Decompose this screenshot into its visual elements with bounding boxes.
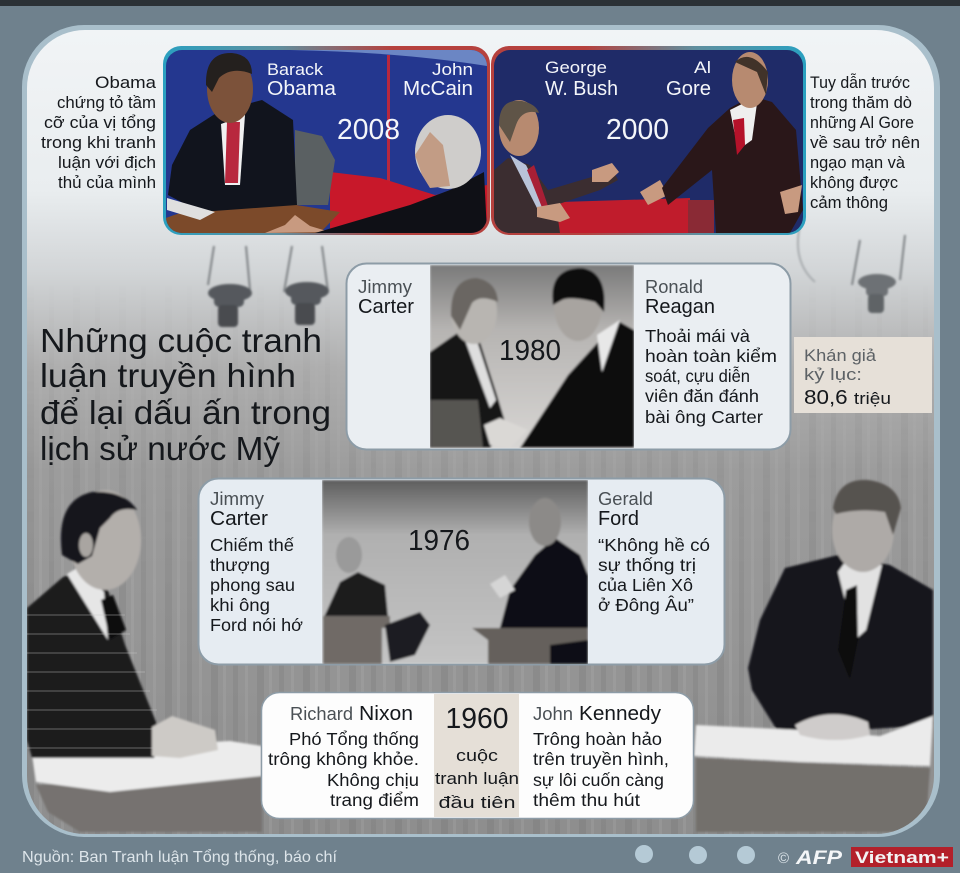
panel: 2000 debate: Gore (666, 78, 711, 100)
panel: 1976 debate: thượng (210, 555, 270, 575)
panel: 1960 debate: Không chịu (327, 770, 419, 790)
panel: 1980 debate: Reagan (645, 296, 715, 318)
studio lights (208, 225, 905, 327)
panel: 1976 debate: khi ông (210, 595, 270, 615)
year box: 1960: 1960 (446, 703, 508, 735)
photo: Carter and Reagan (430, 265, 634, 449)
year box: 1960: cuộc (456, 746, 499, 765)
panel: 1976 debate: Chiếm thế (210, 535, 294, 555)
panel: 1976 debate: sự thống trị (598, 555, 696, 575)
panel: 1960 debate: sự lôi cuốn càng (533, 770, 664, 790)
panel: 1976 debate: “Không hề có (598, 535, 710, 555)
panel: 1960 debate: trông không khỏe. (268, 749, 419, 769)
left caption: Obama: cỡ của vị tổng (44, 113, 156, 132)
left caption: Obama: trong khi tranh (41, 133, 156, 152)
panel: 2008 debate (163, 46, 490, 235)
left caption: Obama: chứng tỏ tầm (57, 93, 156, 112)
photo: Richard Nixon at desk (27, 490, 262, 832)
panel: 2008 debate: Barack (267, 60, 324, 79)
panel: 2008 debate: Obama (267, 78, 337, 100)
scan lines over Nixon (27, 615, 160, 748)
callout: record audience: kỷ lục: (804, 365, 862, 384)
panel: 1980 debate: Jimmy (358, 277, 412, 297)
title: để lại dấu ấn trong (40, 394, 331, 431)
panel: 1960 debate: Richard (290, 704, 353, 724)
title: lịch sử nước Mỹ (40, 430, 281, 467)
panel: 1960 debate: trên truyền hình, (533, 749, 669, 769)
panel: 1980 debate: hoàn toàn kiểm (645, 346, 777, 366)
navigation dots (635, 845, 755, 864)
right caption: Gore: cảm thông (810, 193, 888, 212)
panel: 1960 debate: trang điểm (330, 790, 419, 810)
panel: 1980 debate: viên đăn đánh (645, 386, 759, 406)
logo: AFP (778, 848, 842, 869)
panel: 2000 debate: W. Bush (545, 78, 618, 100)
logo: AFP: © (778, 850, 789, 867)
right caption: Gore: ngạo mạn và (810, 153, 906, 172)
panel: 1960 debate: Phó Tổng thống (289, 729, 419, 749)
left caption: Obama: luận với địch (58, 153, 156, 172)
callout: record audience: Khán giả (804, 346, 877, 365)
logo: AFP: AFP (795, 848, 842, 869)
panel: 2008 debate: John (432, 60, 473, 79)
right caption: Gore: không được (810, 173, 898, 192)
right caption: Gore: về sau trở nên (810, 133, 920, 152)
panel: 2000 debate: 2000 (606, 114, 669, 146)
panel: 1960 debate: Nixon (359, 703, 413, 725)
panel: 2008 debate: McCain (403, 78, 473, 100)
panel: 1976 debate: của Liên Xô (598, 575, 693, 595)
source note: Nguồn: Ban Tranh luận Tổng thống, báo chí (22, 848, 338, 866)
left caption: Obama (41, 73, 157, 192)
panel: 1960 debate: Trông hoàn hảo (533, 729, 662, 749)
year box: 1960: đầu tiên (438, 793, 516, 812)
left caption: Obama: Obama (95, 73, 157, 92)
right caption: Gore: trong thăm dò (810, 93, 912, 112)
title: luận truyền hình (40, 357, 296, 394)
logo: Vietnam+: Vietnam+ (855, 848, 949, 867)
panel: 2000 debate (491, 46, 806, 235)
panel: 1976 debate: Jimmy (210, 489, 264, 509)
panel: 1980 debate: bài ông Carter (645, 407, 763, 427)
panel: 1980 debate: Thoải mái và (645, 326, 750, 346)
panel: 1960 debate: Kennedy (579, 703, 661, 725)
panel: 1976 debate: 1976 (408, 525, 470, 557)
panel: 1976 debate: Carter (210, 508, 268, 530)
panel: 1980 debate: Ronald (645, 277, 703, 297)
panel: 1960 debate: John (533, 704, 573, 724)
panel: 1976 debate: phong sau (210, 575, 295, 595)
photo: Carter and Ford (322, 480, 588, 664)
panel: 1976 debate: Ford (598, 508, 639, 530)
panel: 1976 debate: Ford nói hớ (210, 615, 303, 635)
title (40, 322, 331, 467)
panel: 1980 debate (346, 264, 790, 450)
panel: 1976 debate: ở Đông Âu” (598, 595, 694, 615)
right caption: Gore (810, 73, 920, 212)
panel: 1980 debate: Carter (358, 296, 414, 318)
right caption: Gore: những Al Gore (810, 113, 914, 132)
panel: 2008 debate: 2008 (337, 114, 400, 146)
title: Những cuộc tranh (40, 322, 322, 359)
panel: 1980 debate: 1980 (499, 335, 561, 367)
left caption: Obama: thủ của mình (58, 173, 156, 192)
panel: 2000 debate: Al (694, 58, 711, 77)
year box: 1960: tranh luận (435, 769, 519, 788)
right caption: Gore: Tuy dẫn trước (810, 73, 910, 92)
year box: 1960 (434, 694, 519, 817)
callout: record audience: 80,6 triệu (804, 387, 891, 409)
panel: 1976 debate (198, 478, 724, 664)
panel: 1976 debate: Gerald (598, 489, 653, 509)
panel: 1960 debate: thêm thu hút (533, 790, 640, 810)
panel: 1980 debate: soát, cựu diễn (645, 365, 750, 386)
panel: 1960 debate (262, 692, 694, 818)
photo: John Kennedy at desk (694, 480, 933, 832)
callout: record audience (794, 337, 932, 413)
panel: 2000 debate: George (545, 58, 607, 77)
